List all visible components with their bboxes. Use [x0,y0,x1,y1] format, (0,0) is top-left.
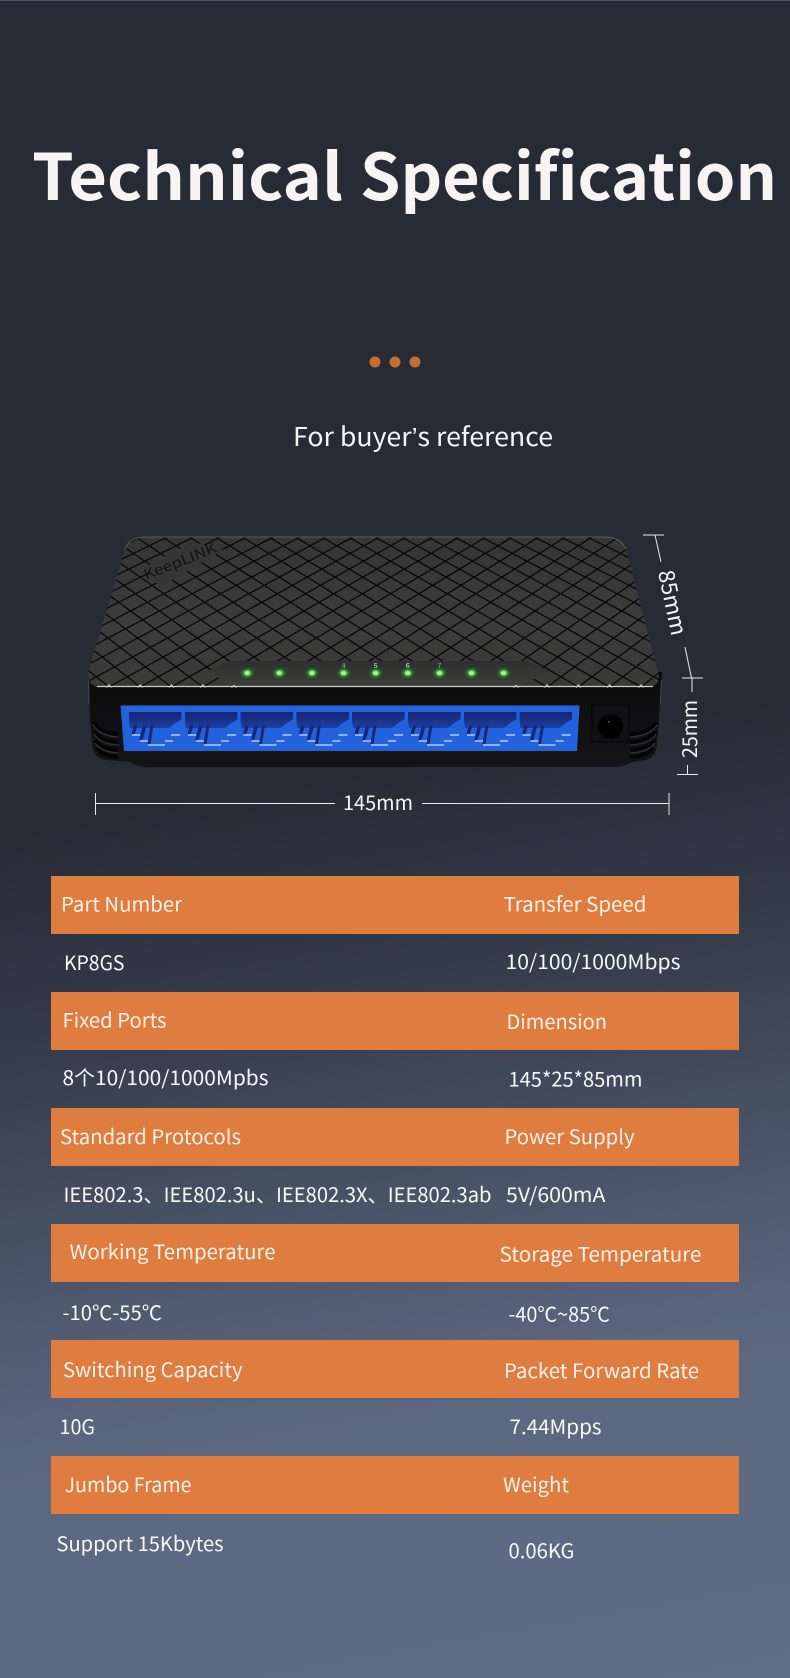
row: working / storage temperature [51,1224,739,1328]
dimension: depth 85mm [643,535,703,678]
row: standard protocols / power supply [51,1108,739,1208]
row: working / storage temperature: -40℃~85℃ [508,1298,610,1328]
side vents [93,722,657,757]
row: part number / transfer speed: 10/100/1000Mbps [506,946,680,975]
title: Technical [32,127,343,219]
port numbers: 4 [342,661,346,671]
port numbers: 6 [406,661,410,671]
row: part number / transfer speed: KP8GS [64,947,125,976]
row: fixed ports / dimension: Dimension [506,1006,607,1035]
row: standard protocols / power supply: 5V/600mA [506,1179,606,1208]
dimension: height 25mm: 25mm [674,700,703,758]
port numbers [342,661,442,671]
row: part number / transfer speed: Part Number [61,888,182,918]
port numbers: 7 [438,661,442,671]
row: fixed ports / dimension: 145*25*85mm [508,1064,642,1092]
product image: network switch [88,536,662,768]
row: standard protocols / power supply: Power Supply [504,1121,635,1150]
row: switching capacity / packet forward rate: Packet Forward Rate [504,1355,699,1384]
LED strip [208,661,548,687]
decorative orange dots [370,356,420,368]
title [32,127,777,219]
row: standard protocols / power supply: IEE802.3、IEE802.3u、IEE802.3X、IEE802.3ab [64,1179,492,1208]
top hairline [0,0,790,1]
front white edge with ticks [97,685,653,688]
row: switching capacity / packet forward rate [51,1340,739,1440]
row: switching capacity / packet forward rate: 10G [60,1411,95,1440]
row: working / storage temperature: Storage Temperature [500,1238,702,1268]
specification table [51,876,739,1564]
row: jumbo frame / weight: 0.06KG [508,1535,574,1564]
dimension: width 145mm [96,787,669,816]
row: standard protocols / power supply: Standard Protocols [60,1121,241,1150]
row: switching capacity / packet forward rate: 7.44Mpps [510,1411,602,1440]
body rim highlights [88,680,662,704]
row: jumbo frame / weight [51,1456,739,1564]
status LEDs [239,666,512,680]
row: working / storage temperature: Working Temperature [70,1236,276,1265]
row: working / storage temperature: -10℃-55℃ [62,1297,162,1326]
row: fixed ports / dimension: Fixed Ports [62,1004,166,1034]
switch body [88,672,662,767]
blue port panel [120,706,580,751]
row: jumbo frame / weight: Jumbo Frame [64,1469,192,1498]
row: switching capacity / packet forward rate: Switching Capacity [63,1354,243,1383]
brand logo: KeepLINK [141,538,219,585]
logo plate [148,543,222,584]
ethernet ports [129,712,572,745]
row: jumbo frame / weight: Weight [503,1469,569,1498]
subtitle: For buyer’s reference [293,417,553,454]
title: Specification [360,127,777,219]
dimension: width 145mm: 145mm [343,787,413,816]
row: jumbo frame / weight: Support 15Kbytes [56,1528,223,1557]
row: part number / transfer speed: Transfer Speed [504,888,646,918]
dimension: depth 85mm: 85mm [651,567,696,638]
port numbers: 5 [374,661,378,671]
surface outline [125,537,626,549]
row: fixed ports / dimension: 8个10/100/1000Mpbs [62,1062,268,1091]
dimension: height 25mm [674,678,703,774]
lattice top surface [88,538,659,687]
row: part number / transfer speed [51,876,739,976]
power jack [592,705,629,742]
row: fixed ports / dimension [51,992,739,1092]
